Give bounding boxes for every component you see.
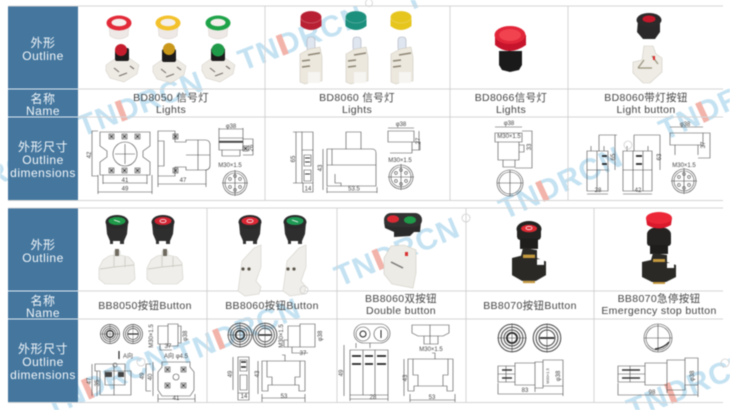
column: BB8050 button: [87, 215, 195, 402]
column: BD8066 lights: [475, 26, 547, 196]
drawing: BD8060 dimensions: 53.5: [348, 186, 360, 192]
drawing: BD8060 dimensions: 27: [416, 137, 422, 144]
drawing: BD8050 dimensions: 47: [180, 178, 187, 184]
panel: bottom header column: Outline: [22, 355, 64, 369]
icon: BD8050 lenses: [106, 16, 230, 39]
icon: BB8050 switch blocks: [99, 249, 183, 284]
drawing: BB8070 dimensions: [498, 324, 563, 396]
drawing: BD8060 dimensions: 14: [305, 186, 312, 192]
drawing: BB8050 dimensions: 41: [173, 396, 180, 402]
drawing: BD8050 dimensions: 42: [87, 151, 93, 158]
label: BD8060: BD8060 信号灯: [319, 92, 395, 104]
watermarks: TNDRCN: TNDRCN: [73, 65, 208, 144]
grid: bottom table lines: [8, 208, 723, 402]
icon: BD8060 lamp caps: [300, 11, 412, 30]
label: BB8060 button: BB8060按钮Button: [225, 299, 319, 312]
label: BD8050: BD8050 信号灯: [133, 92, 209, 104]
drawing: BD8060 dimensions: φ38: [396, 122, 407, 128]
drawing: double button dimensions: 28: [370, 395, 377, 401]
column: BB8070 emergency stop: [601, 212, 717, 397]
icon: BD8066 lamp: [494, 26, 526, 72]
panel: bottom header column: [8, 208, 78, 402]
drawing: double button dimensions: M30×1.5: [419, 347, 443, 353]
drawing: BD8066 dimensions: [495, 121, 533, 196]
drawing: BB8050 dimensions: A向: [123, 352, 133, 360]
drawing: BD8050 dimensions: 26: [249, 144, 255, 151]
drawing: BB8060 dimensions: 53: [281, 394, 288, 400]
drawing: BB8070 dimensions: M30×1.5: [545, 367, 550, 384]
panel: top header column: 名称: [30, 91, 56, 106]
panel: top header column: 外形: [30, 36, 56, 50]
drawing: emergency stop dimensions: φ38: [690, 370, 696, 381]
drawing: BB8070 dimensions: 83: [522, 388, 529, 394]
label: light button: Light button: [616, 104, 676, 116]
drawing: BD8066 dimensions: φ38: [504, 121, 515, 127]
drawing: BB8070 dimensions: φ38: [556, 370, 562, 381]
drawing: BB8050 dimensions: [87, 324, 195, 402]
drawing: BD8050 dimensions: 41: [122, 178, 129, 184]
table: bottom: [8, 208, 723, 402]
panel: top header column: Name: [26, 104, 60, 118]
drawing: BD8066 dimensions: M30×1.5: [497, 134, 521, 140]
column: BB8060 button: [225, 215, 324, 402]
label: light button: [604, 91, 688, 116]
label: BD8050: [133, 92, 209, 116]
panel: bottom header column: Outline: [22, 251, 64, 265]
column: BD8050 lights: [87, 16, 255, 196]
icon: double button head: [384, 213, 422, 237]
watermarks: TNDRCN: TNDRCN: [170, 292, 306, 372]
drawing: BD8060 dimensions: 43: [318, 164, 324, 171]
watermarks: TNDRCN: TNDRCN: [234, 0, 369, 78]
label: BD8060: Lights: [342, 104, 372, 116]
icon: BB8060 buttons: [238, 215, 306, 244]
icon: BB8050 buttons: [106, 215, 174, 244]
icon: emergency stop button: [642, 212, 676, 284]
drawing: BB8050 dimensions: 37: [165, 344, 172, 350]
label: double button: Double button: [366, 305, 436, 317]
icon: BD8050 bases: [106, 43, 235, 83]
column: BD8060 lights: [291, 11, 422, 193]
drawing: BB8050 dimensions: 47: [87, 377, 93, 384]
column: BB8060 double button: [339, 213, 455, 402]
drawing: BB8050 dimensions: M30×1.5: [149, 324, 155, 348]
drawing: BD8050 dimensions: φ38: [226, 124, 237, 130]
icon: light button cap: [636, 13, 662, 39]
label: BD8066: [475, 92, 547, 116]
drawing: BB8060 dimensions: [228, 322, 324, 402]
drawing: light button dimensions: 42: [635, 188, 642, 194]
drawing: BB8060 dimensions: 14: [241, 394, 248, 400]
drawing: double button dimensions: 43: [403, 374, 409, 381]
drawing: BD8050 dimensions: 49: [122, 186, 129, 192]
drawing: BD8066 dimensions: 33: [527, 143, 533, 150]
drawing: BD8050 dimensions: [87, 124, 255, 196]
drawing: emergency stop dimensions: 98: [649, 390, 656, 396]
label: double button: [365, 292, 437, 317]
drawing: BB8060 dimensions: 37: [300, 351, 307, 357]
drawing: BB8060 dimensions: 43: [255, 370, 261, 377]
drawing: double button dimensions: 53: [429, 395, 436, 401]
label: BB8070 button: BB8070按钮Button: [483, 299, 577, 312]
drawing: BD8060 dimensions: 65: [291, 155, 297, 162]
label: light button: BD8060带灯按钮: [604, 91, 688, 104]
drawing: double button dimensions: [339, 324, 455, 402]
drawing: BB8060 dimensions: φ38: [318, 330, 324, 341]
icon: double button module: [384, 245, 416, 288]
watermarks: TNDRCN: TNDRCN: [330, 211, 465, 293]
drawing: BD8060 dimensions: [291, 122, 422, 193]
label: double button: BB8060双按钮: [365, 292, 437, 305]
column: BD8060 light button: [587, 13, 710, 194]
panel: top header column: Outline: [22, 49, 64, 63]
drawing: BB8050 dimensions: 35: [95, 379, 101, 386]
label: BD8050: Lights: [156, 104, 186, 116]
drawing: light button dimensions: φ38: [680, 122, 691, 128]
panel: top header column: Outline: [22, 153, 64, 167]
drawing: BB8050 dimensions: 49: [140, 372, 146, 379]
panel: top header column: 外形尺寸: [18, 140, 68, 154]
label: BD8066: BD8066信号灯: [475, 92, 547, 104]
drawing: BD8060 dimensions: M30×1.5: [388, 158, 412, 164]
grid: top table lines: [8, 6, 723, 200]
drawing: light button dimensions: 28: [595, 188, 602, 194]
panel: bottom header column: 名称: [30, 293, 56, 308]
label: emergency stop: [601, 292, 717, 317]
drawing: BB8050 dimensions: A向 φ4.5: [164, 352, 189, 360]
column: BB8070 button: [483, 221, 577, 396]
panel: top header column: dimensions: [10, 166, 76, 180]
drawing: light button dimensions: 65: [611, 153, 617, 160]
drawing: BD8050 dimensions: M30×1.5: [218, 163, 242, 169]
icon: light button module: [633, 46, 662, 83]
label: BD8066: Lights: [496, 104, 526, 116]
drawing: light button dimensions: 37: [701, 141, 707, 148]
drawing: emergency stop dimensions: [618, 324, 698, 397]
label: BB8050: BB8050按钮Button: [98, 299, 192, 312]
drawing: light button dimensions: 63: [657, 153, 663, 160]
icon: BD8060 modules: [300, 37, 413, 84]
label: emergency stop: BB8070急停按钮: [618, 292, 701, 305]
drawing: BB8060 dimensions: 49: [228, 370, 234, 377]
drawing: light button dimensions: M30×1.5: [672, 163, 696, 169]
drawing: double button dimensions: 49: [339, 369, 345, 376]
panel: bottom header column: dimensions: [10, 368, 76, 382]
watermarks: TNDRCN: TNDRCN: [494, 140, 628, 226]
label: BD8060: [319, 92, 395, 116]
label: emergency stop: Emergency stop button: [601, 305, 717, 317]
drawing: BB8060 dimensions: M30×1.5: [279, 324, 285, 348]
panel: bottom header column: Name: [26, 306, 60, 320]
drawing: BB8050 dimensions: φ38: [183, 330, 189, 341]
panel: bottom header column: 外形尺寸: [18, 342, 68, 356]
icon: registered marks: [137, 0, 729, 367]
icon: BB8060 switch blocks: [238, 245, 306, 296]
drawing: light button dimensions: [587, 122, 710, 194]
panel: top header column: [8, 6, 78, 200]
table: top: [8, 6, 723, 200]
panel: bottom header column: 外形: [30, 238, 56, 252]
drawing: BB8050 dimensions: 40: [148, 373, 154, 380]
icon: BB8070 button: [512, 221, 546, 283]
